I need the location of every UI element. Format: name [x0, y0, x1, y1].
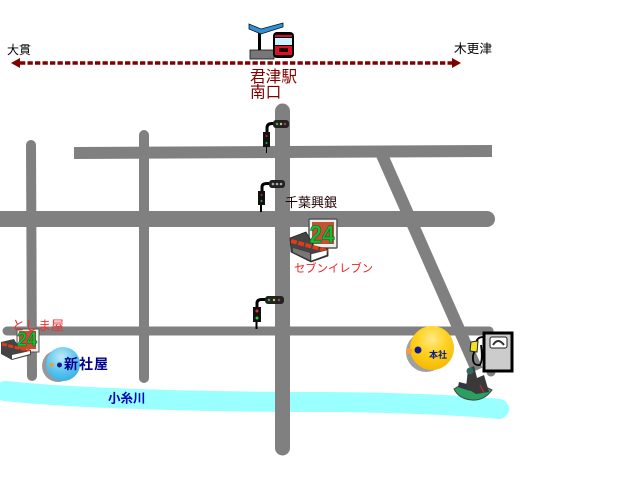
label: Seven-Eleven: セブンイレブン [294, 261, 373, 275]
label: Kimitsu station south exit: 南口 [250, 84, 281, 102]
label: Chiba Kogyo Bank: 千葉興銀 [285, 195, 337, 210]
icon: head office marker [406, 326, 454, 372]
icon: convenience store Toshimaya [1, 329, 39, 360]
river [5, 391, 499, 409]
icon: monument park [454, 366, 492, 400]
icon: convenience store Toshimaya: 24 [17, 329, 38, 351]
roads [0, 111, 492, 448]
label: Onuki: 大貫 [7, 43, 31, 57]
label: Kimitsu station south exit: 君津駅 [250, 68, 297, 86]
icon: station and train [249, 23, 294, 59]
label: Koito river: 小糸川 [108, 390, 146, 406]
icon: gas station [470, 333, 512, 371]
icon: traffic signal bottom [253, 296, 284, 329]
label: Toshimaya: としま屋 [12, 318, 64, 333]
icon: new office marker [42, 347, 80, 382]
label: new office: 新社屋 [64, 356, 109, 372]
icon: traffic signal top [263, 120, 289, 153]
icon: convenience store Seven-Eleven [290, 219, 337, 262]
label: Kisarazu: 木更津 [454, 42, 492, 56]
icon: traffic signal middle [258, 180, 285, 212]
railway line [11, 58, 461, 68]
icon: convenience store Seven-Eleven: 24 [310, 221, 335, 249]
label: head office: 本社 [429, 349, 447, 360]
label: Kimitsu station south exit [250, 68, 297, 102]
